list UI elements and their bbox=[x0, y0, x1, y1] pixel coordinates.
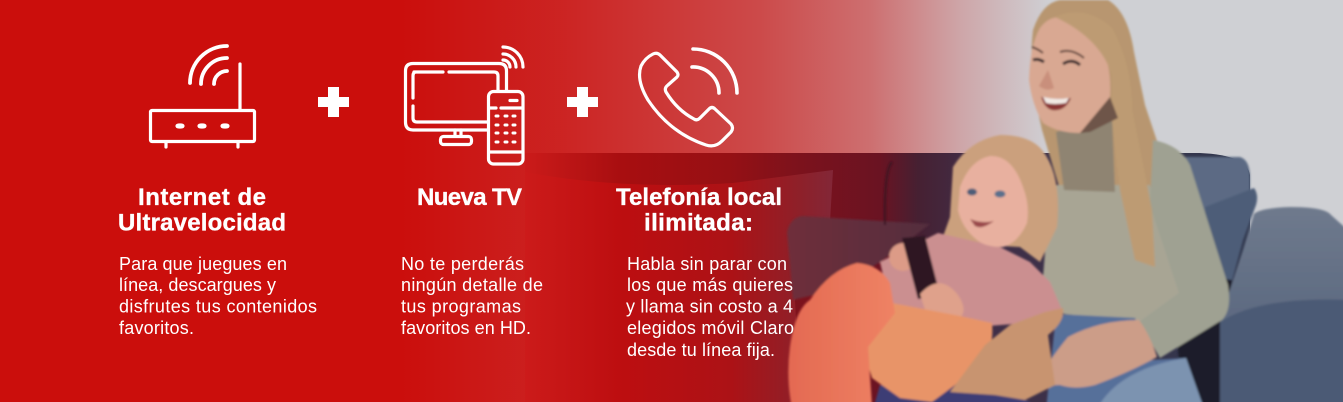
woman hand bbox=[1035, 320, 1157, 388]
woman face bbox=[1029, 17, 1110, 133]
sofa small cushion bbox=[787, 216, 930, 300]
woman sweater bbox=[1042, 185, 1182, 322]
text: internet description: línea, descargues y bbox=[119, 275, 276, 295]
text: tv description: ningún detalle de bbox=[401, 275, 543, 295]
text: internet description bbox=[119, 254, 317, 338]
woman hair back bbox=[1032, 0, 1165, 270]
woman neck shadow bbox=[1080, 97, 1118, 133]
text: tv description bbox=[401, 254, 543, 338]
photo: mother and daughter on a sofa bbox=[787, 0, 1343, 402]
column: tv bbox=[401, 47, 543, 338]
text: tv description: tus programas bbox=[401, 296, 521, 316]
woman sleeve bbox=[1139, 140, 1229, 358]
sofa armrest bbox=[1220, 207, 1343, 402]
plus sign 1 bbox=[318, 87, 349, 117]
sofa large cushion bbox=[525, 170, 833, 402]
woman neck bbox=[1056, 115, 1115, 192]
heading: telephone: ilimitada: bbox=[644, 210, 753, 236]
armrest front bbox=[1220, 299, 1343, 402]
icon: remote buttons bbox=[496, 116, 515, 142]
heading: internet bbox=[118, 184, 286, 236]
girl hand with phone bbox=[889, 236, 964, 318]
woman features bbox=[1032, 47, 1084, 110]
icon: tv with remote bbox=[406, 47, 523, 164]
girl hair bbox=[940, 135, 1058, 262]
heading: telephone bbox=[616, 184, 782, 236]
text: telephone description bbox=[626, 254, 794, 360]
sofa back right bbox=[1185, 157, 1250, 300]
text: internet description: Para que juegues en bbox=[119, 254, 287, 274]
heading: telephone: Telefonía local bbox=[616, 184, 782, 211]
heading: internet: Internet de bbox=[138, 184, 266, 211]
plush bunny bbox=[788, 263, 1063, 402]
text: telephone description: los que más quieres bbox=[627, 275, 793, 295]
legs under plush bbox=[870, 385, 1060, 402]
sofa back bbox=[525, 153, 1250, 402]
girl sweater bbox=[880, 233, 1062, 326]
text: internet description: favoritos. bbox=[119, 318, 194, 338]
woman hair front bbox=[1055, 12, 1155, 267]
sofa seam bbox=[885, 162, 892, 225]
sofa gap shadow bbox=[1170, 270, 1232, 402]
text: tv description: No te perderás bbox=[401, 254, 524, 274]
woman jeans bbox=[1045, 314, 1208, 402]
sofa pillow bbox=[1205, 188, 1257, 292]
column: internet bbox=[118, 46, 317, 338]
girl features bbox=[967, 188, 1006, 227]
text: internet description: disfrutes tus contenidos bbox=[119, 296, 317, 316]
heading: internet: Ultravelocidad bbox=[118, 210, 286, 236]
text: tv description: favoritos en HD. bbox=[401, 318, 531, 338]
plus sign 2 bbox=[567, 87, 598, 117]
icon: phone handset bbox=[640, 49, 737, 146]
text: telephone description: Habla sin parar con bbox=[627, 254, 787, 274]
girl face bbox=[958, 156, 1028, 247]
text: telephone description: elegidos móvil Claro bbox=[627, 318, 794, 338]
text: telephone description: y llama sin costo a 4 bbox=[626, 296, 793, 316]
icon: wifi router bbox=[150, 46, 254, 147]
heading: tv: Nueva TV bbox=[417, 184, 522, 211]
column: telephone bbox=[616, 49, 794, 360]
text: telephone description: desde tu línea fija. bbox=[627, 340, 775, 360]
